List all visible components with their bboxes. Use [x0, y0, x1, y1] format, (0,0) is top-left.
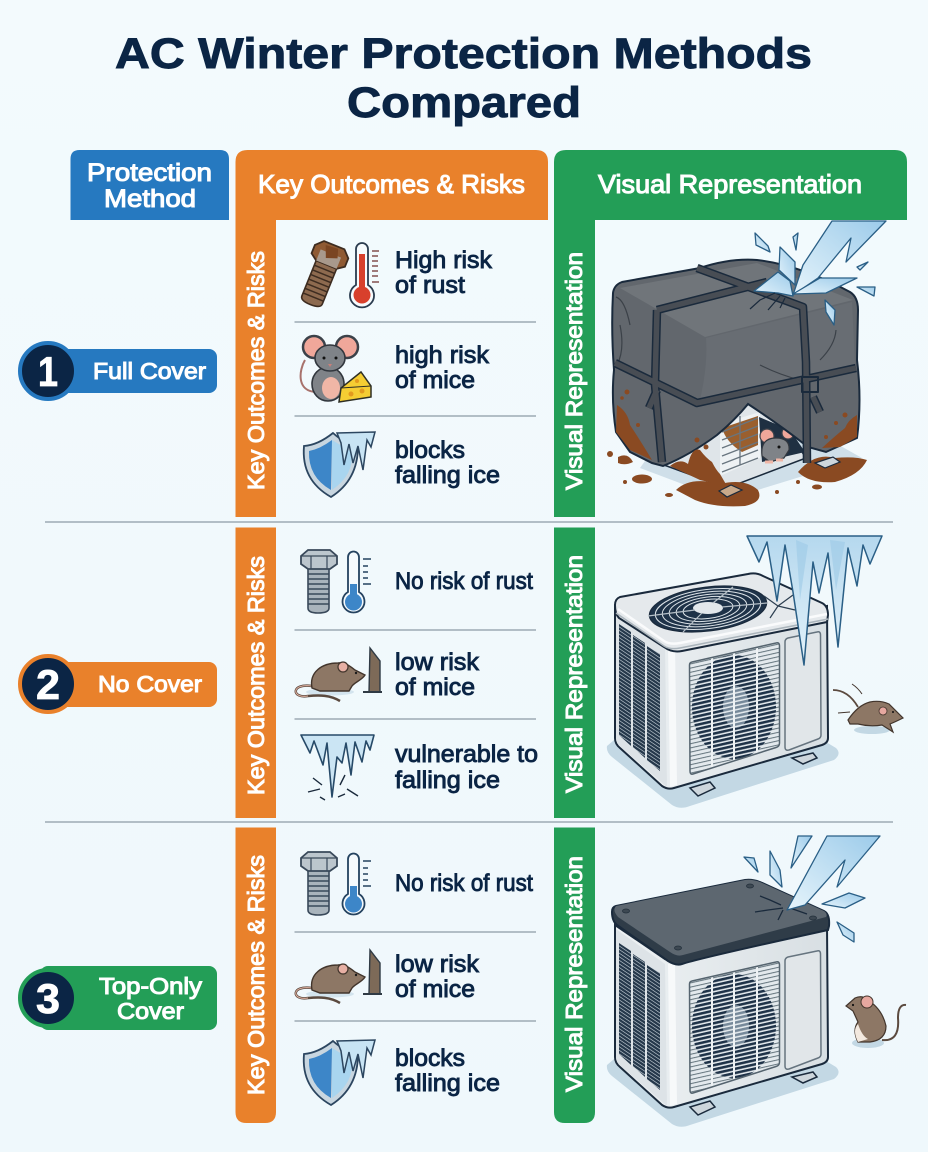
panel: visual representation column: [554, 828, 595, 1123]
ice shaft and shards: [744, 836, 880, 942]
text: blocks falling ice: blocks: [395, 1045, 465, 1072]
method label: top-only cover: Cover: [117, 998, 184, 1024]
method label: full cover: Full Cover: [93, 358, 206, 384]
panel: key outcomes column: [236, 528, 276, 818]
header: protection method: Protection: [87, 159, 212, 187]
panel: visual representation column with header: Visual Representation: [561, 252, 587, 490]
text: blocks falling ice: blocks: [395, 437, 465, 464]
text: high risk of rust: [395, 247, 493, 299]
panel: key outcomes column with header: Key Outcomes & Risks: [258, 169, 525, 199]
text: vulnerable to falling ice: falling ice: [395, 767, 500, 794]
panel: key outcomes column: Key Outcomes & Risks: [243, 855, 269, 1095]
falling ice shaft and shards: [754, 221, 886, 325]
text: no risk of rust: No risk of rust: [395, 870, 533, 897]
text: blocks falling ice: [395, 1045, 500, 1097]
method label: no cover: No Cover: [98, 671, 202, 697]
rust stains: [607, 390, 867, 506]
text: high risk of rust: High risk: [395, 247, 493, 274]
icon: mouse and post: [296, 950, 382, 1003]
text: high risk of mice: high risk: [395, 342, 490, 369]
title: AC Winter Protection Methods: [115, 30, 812, 78]
icon: clean bolt: [301, 852, 337, 915]
icon: hot thermometer: [350, 243, 379, 307]
top cover: [612, 880, 829, 965]
text: low risk of mice: of mice: [395, 976, 475, 1003]
exposed unit under cover: [664, 403, 806, 488]
icon: cold thermometer: [342, 552, 371, 613]
title: [115, 30, 812, 127]
icon: shield blocking ice: [304, 1040, 375, 1105]
text: vulnerable to falling ice: vulnerable to: [395, 741, 538, 768]
icon: shield blocking ice: [304, 432, 375, 497]
text: low risk of mice: [395, 951, 480, 1003]
icon: mouse with cheese: [301, 336, 371, 402]
method label: full cover: [20, 343, 217, 399]
row 1: full cover: [20, 150, 907, 517]
running mouse: [833, 684, 903, 734]
panel: key outcomes column: [236, 828, 276, 1123]
illustration: covered AC unit with rust, mouse and ice: [607, 221, 886, 506]
header: protection method: [70, 150, 229, 220]
method label: full cover: 1: [38, 348, 58, 395]
panel: visual representation column with header: [554, 150, 907, 517]
panel: visual representation column: Visual Representation: [561, 856, 587, 1092]
illustration: uncovered AC unit with icicles and mouse: [607, 536, 903, 808]
panel: key outcomes column with header: [236, 150, 548, 517]
text: low risk of mice: low risk: [395, 649, 480, 676]
text: high risk of mice: of mice: [395, 367, 475, 394]
method label: no cover: [20, 656, 217, 712]
unit top with fan: [615, 573, 828, 652]
panel: visual representation column with header: Visual Representation: [598, 169, 862, 199]
icon: falling icicles: [301, 735, 374, 800]
method label: top-only cover: 3: [36, 975, 60, 1022]
icon: clean bolt: [301, 550, 337, 613]
method label: top-only cover: Top-Only: [99, 973, 203, 999]
header: protection method: Method: [104, 185, 196, 213]
text: blocks falling ice: falling ice: [395, 1070, 500, 1097]
panel: visual representation column: [554, 528, 595, 818]
icon: cold thermometer: [342, 854, 371, 915]
text: blocks falling ice: [395, 437, 500, 489]
sitting mouse: [846, 996, 906, 1048]
text: high risk of rust: of rust: [395, 272, 465, 299]
panel: visual representation column: Visual Representation: [561, 555, 587, 793]
method label: top-only cover: [20, 966, 217, 1030]
text: blocks falling ice: falling ice: [395, 462, 500, 489]
panel: key outcomes column: Key Outcomes & Risks: [243, 556, 269, 795]
illustration: AC unit with top-only cover, ice and mouse: [607, 836, 906, 1127]
text: vulnerable to falling ice: [395, 741, 538, 794]
text: low risk of mice: [395, 649, 480, 701]
title: Compared: [347, 79, 581, 127]
icon: mouse and post: [296, 648, 382, 701]
text: high risk of mice: [395, 342, 490, 394]
row 3: top-only cover: [20, 828, 906, 1127]
icicles: [747, 536, 882, 665]
mouse peeking out: [760, 427, 794, 462]
panel: key outcomes column with header: Key Outcomes & Risks: [243, 251, 269, 490]
straps: [615, 268, 856, 463]
method label: no cover: 2: [36, 661, 60, 708]
text: low risk of mice: of mice: [395, 674, 475, 701]
row 2: no cover: [20, 528, 903, 818]
text: no risk of rust: No risk of rust: [395, 568, 533, 595]
icon: rusty bolt: [294, 238, 351, 311]
text: low risk of mice: low risk: [395, 951, 480, 978]
cover: [612, 260, 860, 466]
